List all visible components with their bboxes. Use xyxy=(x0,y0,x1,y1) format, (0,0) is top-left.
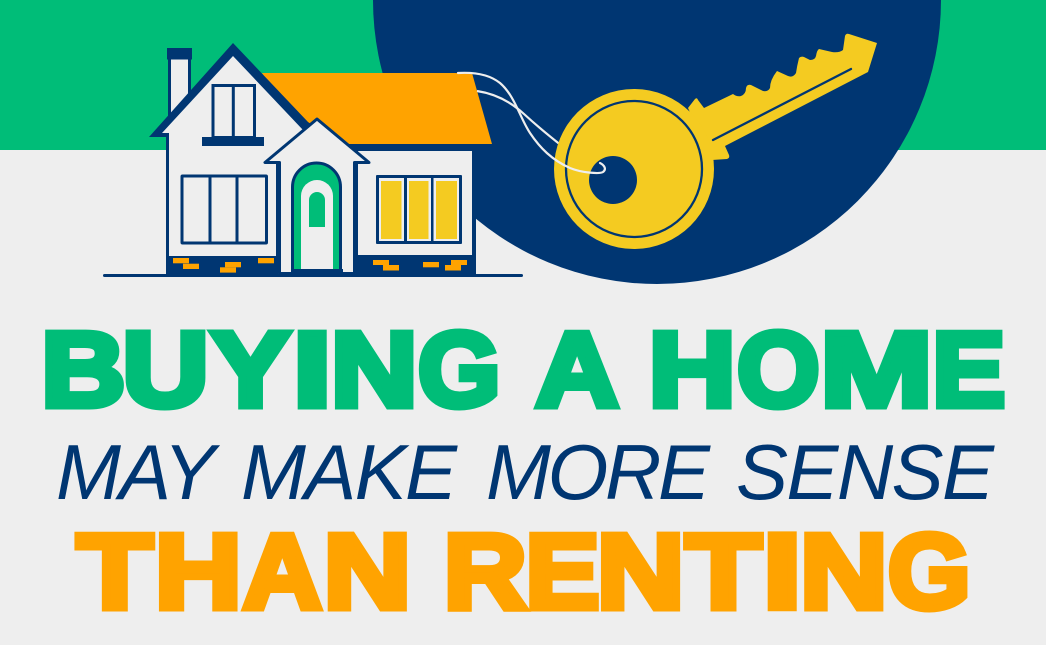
title: buying a home: Y xyxy=(211,311,290,429)
key head xyxy=(554,89,714,249)
title: than renting: H xyxy=(155,513,242,631)
ground line xyxy=(103,274,523,277)
roof xyxy=(262,73,492,144)
title: than renting: A xyxy=(243,513,322,631)
illustration: house xyxy=(103,43,523,277)
green band xyxy=(0,0,1046,150)
title: buying a home: H xyxy=(649,311,736,429)
main gable wall xyxy=(149,43,320,275)
title: buying a home: B xyxy=(41,311,125,429)
title: buying a home: O xyxy=(737,311,820,429)
chimney xyxy=(167,48,192,125)
foundation bricks xyxy=(173,258,467,273)
door xyxy=(291,163,343,276)
upper window xyxy=(202,85,264,146)
key hole xyxy=(589,156,637,204)
string through key xyxy=(458,73,605,173)
title: than renting: E xyxy=(526,513,600,631)
porch gable xyxy=(265,119,369,274)
title: buying a home: N xyxy=(331,311,418,429)
title: than renting: T xyxy=(77,513,153,631)
title: than renting: I xyxy=(763,513,801,631)
string behind key xyxy=(477,91,562,146)
right window xyxy=(376,175,462,244)
title: buying a home: E xyxy=(932,311,1005,429)
title: may make more sense: MAY xyxy=(56,428,220,516)
title: buying a home: I xyxy=(293,311,331,429)
title: than renting: N xyxy=(800,513,888,631)
icon: key xyxy=(554,34,877,249)
title: buying a home: M xyxy=(820,311,932,429)
lower window xyxy=(182,176,266,243)
key blade xyxy=(688,34,877,160)
title: may make more sense: SENSE xyxy=(736,428,995,516)
title: than renting: T xyxy=(686,513,761,631)
right wing wall xyxy=(340,144,476,275)
title: than renting: R xyxy=(444,513,527,631)
title: buying a home: A xyxy=(536,311,616,429)
title: than renting: G xyxy=(888,513,970,631)
title: buying a home: U xyxy=(122,311,209,429)
title: may make more sense: MORE xyxy=(486,428,711,516)
title: than renting: N xyxy=(324,513,411,631)
navy circle xyxy=(373,0,941,284)
key slot xyxy=(713,69,851,140)
title: buying a home: G xyxy=(418,311,500,429)
title: may make more sense: MAKE xyxy=(241,428,458,516)
key inner ring xyxy=(566,101,702,237)
title: than renting: N xyxy=(597,513,684,631)
